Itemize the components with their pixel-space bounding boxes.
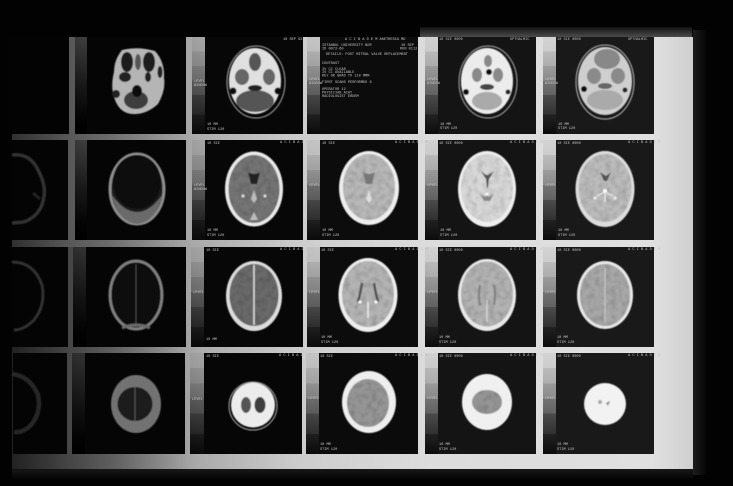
scan labels: 10 SIE 0000 xyxy=(439,38,463,42)
scan labels: 10 SIE 0000 xyxy=(557,249,581,253)
scan labels xyxy=(545,354,660,452)
panel: scan row 4 column 3 xyxy=(306,353,427,454)
panel: column 0 partial scans xyxy=(8,37,69,454)
panel: scan row 3 column 2 xyxy=(191,247,312,347)
scan labels xyxy=(545,38,647,131)
patient text block xyxy=(309,38,417,99)
brain scan: thick white ring xyxy=(462,374,512,430)
patient text block: LEVEL xyxy=(309,78,320,82)
scan labels: 10 MM xyxy=(558,123,569,127)
scan labels: 10 SEP 93 xyxy=(283,38,302,42)
scan labels: STIM 120 xyxy=(439,341,456,345)
scan labels: 10 MM xyxy=(440,229,451,233)
scan labels: 10 SIE xyxy=(320,355,333,359)
scan labels: A C I B A D E M xyxy=(279,354,311,358)
brain scan: dim ring xyxy=(110,261,162,329)
panel: scan row 2 column 5 xyxy=(543,140,660,240)
patient text block: CONTRAST xyxy=(322,62,340,66)
right glow of lightbox xyxy=(693,30,709,475)
scan labels: STIM 120 xyxy=(557,341,574,345)
scan labels xyxy=(309,141,427,238)
panel: scan row 1 column 4 xyxy=(425,37,536,134)
scan labels: 10 SIE 0000 xyxy=(557,355,581,359)
panel: scan row 1 column 2 xyxy=(192,37,303,134)
scan labels xyxy=(193,248,312,342)
brain scan: dim skull with dark interior xyxy=(110,154,164,224)
scan labels: A C I B A D E M xyxy=(280,141,312,145)
scan labels xyxy=(194,141,312,238)
panel: scan row 2 column 3 xyxy=(307,140,427,240)
scan labels: STIM 120 xyxy=(207,234,224,238)
panel: scan row 1 column 5 xyxy=(543,37,654,134)
scan labels: LEVEL xyxy=(545,397,556,401)
scan labels: 10 MM xyxy=(557,336,568,340)
scan labels: 10 SIE 0000 xyxy=(439,355,463,359)
scan labels: WINDOW xyxy=(194,188,208,192)
brain scan: pale ventricles xyxy=(339,151,399,225)
patient text block: OPERATOR 12 xyxy=(322,88,346,92)
scan labels: STIM 120 xyxy=(557,448,574,452)
scan labels: STIM 120 xyxy=(440,127,457,131)
panel: scan row 3 column 3 xyxy=(307,247,427,347)
scan labels xyxy=(308,354,427,452)
scan labels: STIM 120 xyxy=(321,341,338,345)
scan labels: STIM 120 xyxy=(320,448,337,452)
patient text block: PHYSICIAN ACAT xyxy=(322,92,353,96)
scan labels xyxy=(427,38,529,131)
scan labels: 10 MM xyxy=(206,338,217,342)
scan labels xyxy=(309,248,427,345)
scan labels: 10 MM xyxy=(322,229,333,233)
brain scan: skull base bright xyxy=(227,46,285,118)
panel: patient data sheet xyxy=(307,37,418,134)
panel: scan row 3 column 5 xyxy=(543,247,660,347)
scan labels: A C I B A D E M xyxy=(395,354,427,358)
scan labels: A C I B A D E M xyxy=(628,248,660,252)
brain scan: gray ventricles xyxy=(576,151,634,227)
scan labels: 10 MM xyxy=(320,443,331,447)
scan labels: 10 SIE xyxy=(207,142,220,146)
brain scan: lateral ventricles xyxy=(338,258,398,332)
bottom glow of lightbox xyxy=(12,469,693,481)
patient text block: WINDOW xyxy=(309,82,323,86)
scan labels: LEVEL xyxy=(309,184,320,188)
patient text block: RUN 0112 xyxy=(400,48,417,52)
panel: scan row 2 column 4 xyxy=(425,140,542,240)
scan labels: OPTHALMIC xyxy=(510,38,529,42)
scan labels: STIM 120 xyxy=(439,448,456,452)
patient text block: FIRST SCANS PERFORMED 8 xyxy=(322,81,372,85)
scan labels: 10 SIE xyxy=(321,249,334,253)
scan labels xyxy=(545,141,660,238)
scan labels: LEVEL xyxy=(427,184,438,188)
scan labels: WINDOW xyxy=(427,82,441,86)
scan labels: 10 SIE xyxy=(206,355,219,359)
dim top edge of film xyxy=(420,27,692,37)
brain scan: skull base sinus xyxy=(459,46,517,118)
brain scan: thick dim ring xyxy=(111,375,161,433)
scan labels: STIM 120 xyxy=(440,234,457,238)
panel: scan row 2 column 2 xyxy=(192,140,312,240)
panel: scan row 3 column 1 xyxy=(73,247,186,347)
panel: scan row 1 column 1 xyxy=(75,37,186,134)
brain scan: bright ventricles xyxy=(458,151,516,227)
patient text block: ISTANBUL UNIVERSITY NOR xyxy=(322,44,372,48)
patient text block: DETAILS: POST MITRAL VALVE REPLACEMENT xyxy=(326,53,409,57)
scan labels xyxy=(194,38,302,132)
scan labels: WINDOW xyxy=(194,84,208,88)
patient text block: KEY OK GRAD TO 110 MMM xyxy=(322,74,369,78)
scan labels: 10 SIE 0000 xyxy=(439,142,463,146)
scan labels: LEVEL xyxy=(192,398,203,402)
patient text block: 10 SEP xyxy=(401,44,414,48)
scan labels xyxy=(192,354,311,402)
panel: scan row 4 column 5 xyxy=(543,353,660,454)
brain scan: upper ventricles xyxy=(458,259,516,331)
scan labels: STIM 120 xyxy=(207,128,224,132)
scan labels xyxy=(545,248,660,345)
scan labels: 10 MM xyxy=(321,336,332,340)
scan labels: 10 SIE xyxy=(322,142,335,146)
panel: scan row 4 column 2 xyxy=(190,353,311,454)
scan labels: A C I B A D E M xyxy=(510,354,542,358)
scan labels: LEVEL xyxy=(427,78,438,82)
brain scan: skull base xyxy=(112,48,164,114)
scan labels xyxy=(427,354,542,452)
scan labels: 10 MM xyxy=(439,336,450,340)
scan labels: A C I B A D E M xyxy=(510,248,542,252)
patient text block: RADIOLOGIST ERDEM xyxy=(322,95,359,99)
scan labels: LEVEL xyxy=(194,184,205,188)
scan labels: A C I B A D E M xyxy=(510,141,542,145)
brain scan: frontal and temporal lobes xyxy=(576,45,634,119)
scan labels: LEVEL xyxy=(427,291,438,295)
left lower shading of film xyxy=(12,247,200,470)
scan labels: 10 SIE 0000 xyxy=(439,249,463,253)
scan labels: LEVEL xyxy=(427,397,438,401)
scan labels: STIM 120 xyxy=(558,234,575,238)
brain scan: top of skull xyxy=(584,383,626,425)
scan labels: LEVEL xyxy=(309,291,320,295)
panel: scan row 2 column 1 xyxy=(75,140,186,240)
scan labels: LEVEL xyxy=(545,78,556,82)
panel: scan row 3 column 4 xyxy=(425,247,542,347)
scan labels: 10 MM xyxy=(439,443,450,447)
scan labels: STIM 120 xyxy=(322,234,339,238)
brain scan: ventricles xyxy=(225,152,283,226)
scan labels: OPTHALMIC xyxy=(628,38,647,42)
brain scan: hemispheres with midline xyxy=(226,261,282,331)
scan labels: 10 MM xyxy=(558,229,569,233)
panel: scan row 4 column 1 xyxy=(72,353,185,454)
scan labels: LEVEL xyxy=(545,291,556,295)
patient text block: IV CC AVAILABLE xyxy=(322,71,354,75)
scan labels: 10 SIE xyxy=(206,249,219,253)
scan labels: A C I B A D E M xyxy=(395,248,427,252)
brain scan: white crown with dark sulci xyxy=(229,382,277,430)
scan labels xyxy=(427,248,542,345)
scan labels: 10 MM xyxy=(207,229,218,233)
scan labels: 10 SIE 0000 xyxy=(557,38,581,42)
scan labels: LEVEL xyxy=(193,291,204,295)
scan labels: 10 MM xyxy=(557,443,568,447)
patient text block: ID 0072-60 xyxy=(322,48,344,52)
brain scan: white ring with gray center xyxy=(342,371,396,433)
scan labels: A C I B A D E M xyxy=(280,248,312,252)
scan labels: LEVEL xyxy=(308,397,319,401)
scan labels: 10 MM xyxy=(207,123,218,127)
scan labels xyxy=(427,141,542,238)
patient text block: IV CC CLEAR xyxy=(322,68,347,72)
scan labels: LEVEL xyxy=(194,80,205,84)
scan labels: A C I B A D E M xyxy=(628,141,660,145)
panel: scan row 4 column 4 xyxy=(425,353,542,454)
patient text block: A C I B A D E M ANETHESIA MD xyxy=(345,38,405,42)
scan labels: A C I B A D E M xyxy=(628,354,660,358)
scan labels: STIM 120 xyxy=(558,127,575,131)
scan labels: WINDOW xyxy=(545,82,559,86)
scan labels: A C I B A D E M xyxy=(395,141,427,145)
brain scan: upper cortex xyxy=(577,261,633,329)
scan labels: 10 MM xyxy=(440,123,451,127)
scan labels: 10 SIE 0000 xyxy=(557,142,581,146)
scan labels: LEVEL xyxy=(545,184,556,188)
